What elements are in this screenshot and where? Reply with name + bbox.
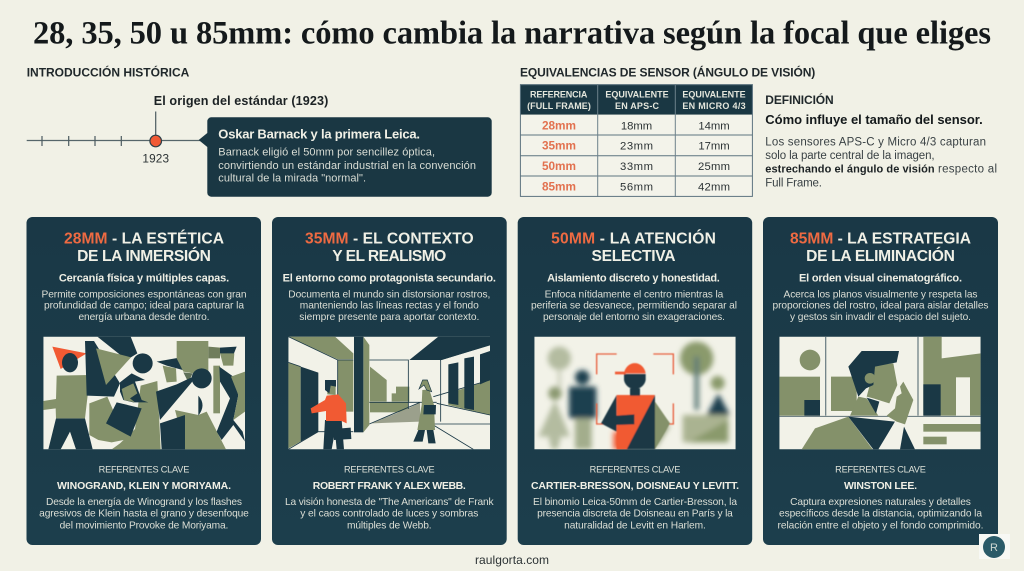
heading: 85mm bbox=[790, 230, 971, 265]
definition: Los sensores APS-C y Micro 4/3 capturan bbox=[765, 136, 986, 148]
label: referentes clave: REFERENTES CLAVE bbox=[835, 465, 926, 475]
label: referentes clave: REFERENTES CLAVE bbox=[99, 465, 189, 475]
table: REFERENCIA bbox=[530, 90, 588, 100]
table: 56mm bbox=[620, 181, 653, 193]
description: energía urbana desde dentro. bbox=[78, 312, 210, 323]
description: Permite composiciones espontáneas con gran bbox=[42, 289, 246, 300]
table: 42mm bbox=[698, 181, 730, 193]
table: 17mm bbox=[698, 141, 730, 153]
references text bbox=[39, 497, 249, 531]
panel: 35mm bbox=[272, 217, 507, 545]
timeline: 1923 bbox=[142, 152, 169, 166]
description bbox=[42, 289, 246, 323]
description: manteniendo las líneas rectas y el fondo bbox=[300, 301, 479, 312]
definition bbox=[765, 92, 997, 189]
description: y gestos sin invadir el espacio del sujeto. bbox=[790, 312, 971, 323]
description: profundidad de campo; ideal para capturar la bbox=[44, 301, 244, 312]
description: personaje del entorno sin exageraciones. bbox=[543, 312, 725, 323]
heading: 28mm: DE LA INMERSIÓN bbox=[77, 246, 211, 265]
references text: Desde la energía de Winogrand y los flashes bbox=[46, 497, 242, 508]
references text: Captura expresiones naturales y detalles bbox=[790, 497, 971, 508]
subheading: El entorno como protagonista secundario. bbox=[283, 273, 496, 285]
references text: naturalidad de Levitt en Harlem. bbox=[564, 520, 706, 531]
description bbox=[772, 289, 988, 323]
panel: introducción histórica bbox=[27, 64, 492, 197]
callout: Oskar Barnack: Oskar Barnack y la primera Leica. bbox=[218, 126, 420, 141]
table: 25mm bbox=[698, 161, 730, 173]
table: 23mm bbox=[620, 141, 653, 153]
references text: del movimiento Provoke de Moriyama. bbox=[60, 520, 228, 531]
timeline label: El origen del estándar (1923) bbox=[154, 94, 328, 108]
icon: logo bbox=[979, 534, 1010, 559]
definition: estrechando el ángulo de visión bbox=[765, 164, 935, 176]
heading: equivalencias: EQUIVALENCIAS DE SENSOR (ÁNGULO DE VISIÓN) bbox=[520, 64, 815, 80]
table: 14mm bbox=[698, 120, 730, 132]
heading: 85mm: 85MM - LA ESTRATEGIA bbox=[790, 230, 971, 248]
description: Documenta el mundo sin distorsionar rostros, bbox=[288, 289, 490, 300]
references text: específicos desde la distancia, optimizando la bbox=[779, 509, 982, 520]
table: 33mm bbox=[620, 161, 653, 173]
description: siempre presente para aportar contexto. bbox=[299, 312, 479, 323]
references text: presencia discreta de Doisneau en París y la bbox=[537, 509, 733, 520]
subheading: Cercanía física y múltiples capas. bbox=[59, 273, 229, 285]
description: proporciones del rostro, ideal para aislar detalles bbox=[772, 301, 988, 312]
illustration: selective focus subject bbox=[534, 336, 736, 450]
definition: Full Frame. bbox=[765, 177, 822, 189]
table bbox=[520, 84, 753, 197]
table: (FULL FRAME) bbox=[527, 101, 591, 111]
references text: múltiples de Webb. bbox=[347, 520, 432, 531]
table: 28mm bbox=[542, 118, 576, 132]
callout: Oskar Barnack bbox=[199, 117, 492, 197]
names: WINSTON LEE. bbox=[844, 480, 917, 492]
illustration: crowd immersion bbox=[43, 336, 245, 450]
definition: Cómo influye el tamaño del sensor. bbox=[765, 112, 983, 127]
references text: y el caos controlado de luces y sombras bbox=[300, 509, 478, 520]
references text: La visión honesta de "The Americans" de Frank bbox=[285, 497, 495, 508]
description: periferia se desvanece, permitiendo separar al bbox=[531, 301, 737, 312]
footer: website: raulgorta.com bbox=[475, 553, 549, 567]
label: referentes clave: REFERENTES CLAVE bbox=[590, 465, 680, 475]
references text: agresivos de Klein hasta el grano y desenfoque bbox=[39, 509, 249, 520]
heading: 35mm bbox=[305, 230, 474, 265]
panel: 50mm bbox=[518, 217, 752, 545]
heading: 50mm: 50MM - LA ATENCIÓN bbox=[551, 228, 716, 248]
heading: 85mm: DE LA ELIMINACIÓN bbox=[806, 246, 955, 265]
panel: equivalencias de sensor bbox=[520, 64, 997, 197]
heading: 35mm: Y EL REALISMO bbox=[332, 248, 446, 265]
names: CARTIER-BRESSON, DOISNEAU Y LEVITT. bbox=[531, 480, 739, 492]
title: 28, 35, 50 u 85mm: cómo cambia la narrativa según la focal que eliges bbox=[33, 16, 991, 52]
callout: Oskar Barnack: cultural de la mirada "normal". bbox=[218, 173, 366, 185]
timeline bbox=[27, 112, 204, 166]
references text: relación entre el objeto y el fondo comprimido. bbox=[778, 520, 984, 531]
table: 18mm bbox=[621, 120, 652, 132]
callout: Oskar Barnack: convirtiendo un estándar industrial en la convención bbox=[218, 160, 476, 172]
table: EN MICRO 4/3 bbox=[682, 101, 746, 111]
subheading: El orden visual cinematográfico. bbox=[799, 273, 962, 285]
references text bbox=[778, 497, 984, 531]
definition: respecto al bbox=[938, 164, 997, 176]
subheading: Aislamiento discreto y honestidad. bbox=[547, 273, 720, 285]
heading: 50mm: SELECTIVA bbox=[592, 248, 676, 265]
table: 50mm bbox=[542, 159, 576, 173]
table: EQUIVALENTE bbox=[605, 90, 669, 100]
description: Enfoca nítidamente el centro mientras la bbox=[545, 289, 724, 300]
panel: 85mm bbox=[763, 217, 998, 545]
names: WINOGRAND, KLEIN Y MORIYAMA. bbox=[57, 480, 231, 492]
illustration: street with context bbox=[288, 336, 490, 450]
heading: 28mm bbox=[64, 228, 224, 265]
description bbox=[531, 289, 737, 323]
references text: El binomio Leica-50mm de Cartier-Bresson, la bbox=[533, 497, 737, 508]
references text bbox=[285, 497, 495, 531]
heading: 50mm bbox=[551, 228, 716, 265]
heading: introducción histórica: INTRODUCCIÓN HISTÓRICA bbox=[27, 64, 190, 80]
description: Acerca los planos visualmente y respeta las bbox=[784, 289, 978, 300]
callout: Oskar Barnack: Barnack eligió el 50mm por sencillez óptica, bbox=[218, 147, 435, 159]
description bbox=[288, 289, 490, 323]
names: ROBERT FRANK Y ALEX WEBB. bbox=[313, 480, 466, 492]
table: 35mm bbox=[542, 139, 576, 153]
illustration: compressed portrait bbox=[779, 336, 981, 450]
heading: 28mm: 28MM - LA ESTÉTICA bbox=[64, 228, 224, 248]
references text bbox=[533, 497, 737, 531]
table: EN APS-C bbox=[615, 101, 660, 111]
heading: 35mm: 35MM - EL CONTEXTO bbox=[305, 230, 474, 248]
label: referentes clave: REFERENTES CLAVE bbox=[344, 465, 435, 475]
panel: 28mm bbox=[26, 217, 261, 545]
icon: logo: R bbox=[990, 542, 998, 554]
table: 85mm bbox=[542, 179, 576, 193]
table: EQUIVALENTE bbox=[682, 90, 746, 100]
definition: solo la parte central de la imagen, bbox=[765, 150, 935, 162]
definition: DEFINICIÓN bbox=[765, 92, 834, 107]
